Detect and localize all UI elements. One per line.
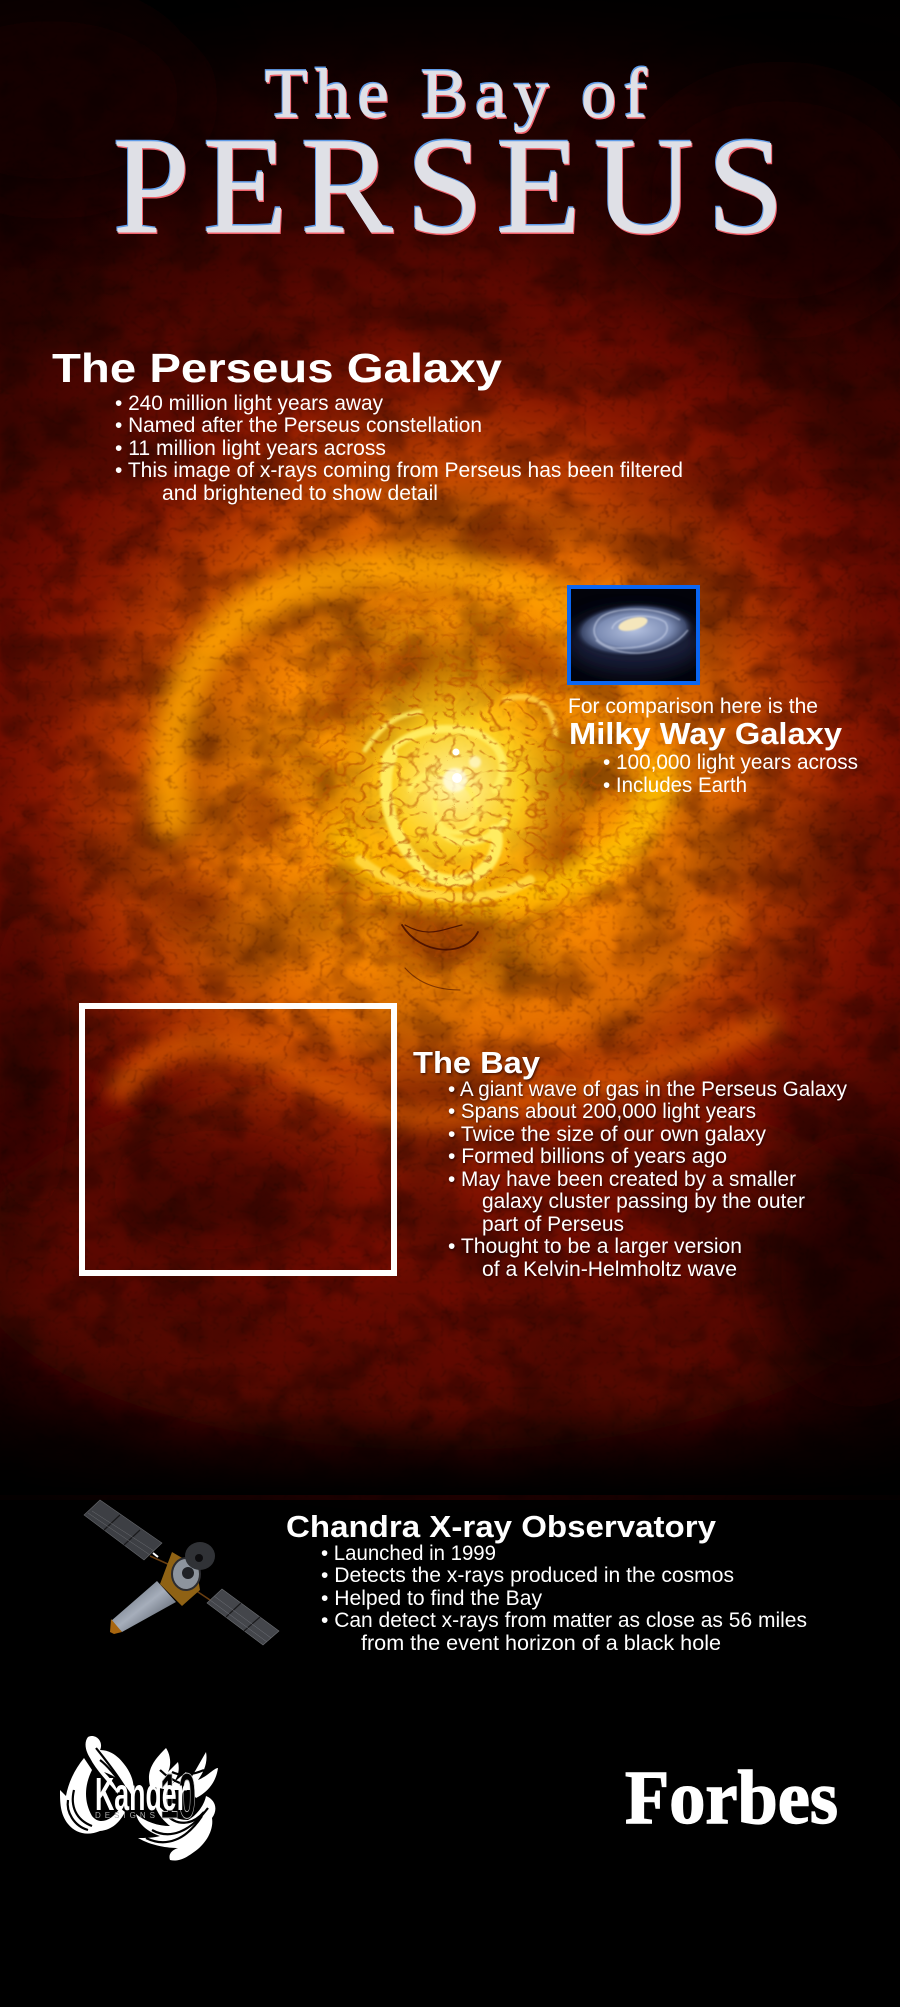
number 10 outline: 10: [160, 1760, 196, 1832]
solar panel upper: [84, 1500, 162, 1560]
designs wordmark: DESIGNS: [95, 1811, 155, 1820]
perseus facts: • This image of x-rays coming from Perseus has been filtered: [115, 459, 683, 482]
gold tip: [110, 1619, 122, 1634]
background: perseus x-ray nebula: [0, 0, 900, 1500]
bay text: [413, 1045, 847, 1281]
chandra facts: [321, 1542, 807, 1655]
gold instrument body: [160, 1552, 200, 1606]
milky way facts: [603, 751, 858, 797]
logo: kander designs: [60, 1736, 218, 1861]
title: [113, 56, 784, 262]
chandra facts: • Can detect x-rays from matter as close as 56 miles: [321, 1609, 807, 1632]
spiral arms: [120, 569, 770, 1118]
bay facts: • Twice the size of our own galaxy: [448, 1123, 767, 1146]
cloud and mottled texture: [0, 0, 900, 1500]
vein texture: [0, 0, 900, 1500]
broad dark regions: [0, 0, 900, 1390]
heading: the bay: The Bay: [413, 1045, 541, 1080]
fine filaments around the core: [271, 574, 668, 985]
title line: PERSEUS: PERSEUS: [113, 109, 784, 262]
flourishes: [60, 1736, 218, 1861]
bay facts: • Spans about 200,000 light years: [448, 1100, 756, 1123]
milky way facts: • 100,000 light years across: [603, 751, 858, 774]
title line: The Bay of: The Bay of: [265, 56, 648, 133]
dark patches in rings: [152, 516, 581, 963]
bay facts: part of Perseus: [482, 1213, 624, 1236]
panel arms: [150, 1556, 210, 1600]
icon: chandra satellite: [84, 1500, 279, 1645]
bright core of the galaxy: [325, 655, 585, 915]
telescope tube: [111, 1581, 176, 1632]
lower glow: [0, 1070, 900, 1450]
bay facts: of a Kelvin-Helmholtz wave: [482, 1258, 737, 1281]
intro line: For comparison here is the: [568, 695, 818, 718]
heading: the perseus galaxy: The Perseus Galaxy: [52, 345, 502, 391]
panel: the bay: [82, 1006, 847, 1281]
bay facts: • Thought to be a larger version: [448, 1235, 742, 1258]
perseus facts: • 240 million light years away: [115, 392, 383, 415]
dish: [185, 1542, 215, 1570]
chandra facts: • Launched in 1999: [321, 1542, 496, 1565]
dark arcs near the core: [402, 925, 478, 990]
panel: chandra x-ray observatory: [286, 1509, 807, 1655]
black knockouts in flourishes: [68, 1748, 208, 1842]
lens housing: [172, 1558, 200, 1590]
heading: milky way galaxy: Milky Way Galaxy: [569, 716, 843, 751]
bay highlight frame: [82, 1006, 394, 1273]
panel: the perseus galaxy: [52, 345, 683, 505]
chandra facts: • Helped to find the Bay: [321, 1587, 542, 1610]
milky way facts: • Includes Earth: [603, 774, 747, 797]
perseus facts: • 11 million light years across: [115, 437, 386, 460]
bay facts: [448, 1078, 847, 1281]
kander wordmark: Kander: [95, 1768, 187, 1820]
bay facts: • A giant wave of gas in the Perseus Galaxy: [448, 1078, 847, 1101]
perseus facts: [115, 392, 683, 505]
chandra facts: • Detects the x-rays produced in the cosmos: [321, 1564, 734, 1587]
perseus facts: and brightened to show detail: [162, 482, 438, 505]
panel: milky way comparison: [567, 587, 858, 797]
milky way image: [567, 587, 703, 683]
heading: chandra: Chandra X-ray Observatory: [286, 1509, 717, 1544]
chandra facts: from the event horizon of a black hole: [361, 1632, 721, 1655]
perseus facts: • Named after the Perseus constellation: [115, 414, 482, 437]
bay facts: • May have been created by a smaller: [448, 1168, 796, 1191]
solar panel lower: [207, 1589, 279, 1645]
bay facts: • Formed billions of years ago: [448, 1145, 727, 1168]
bay facts: galaxy cluster passing by the outer: [482, 1190, 805, 1213]
logo: forbes: Forbes: [625, 1756, 838, 1840]
